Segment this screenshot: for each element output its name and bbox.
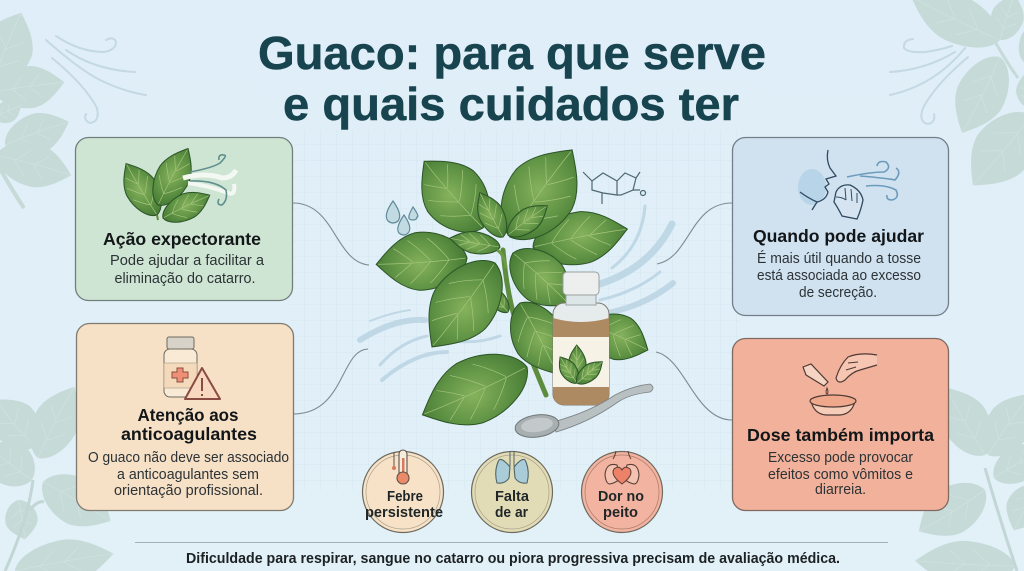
badge: febre persistente: persistente — [365, 504, 443, 521]
icon: coughing person — [798, 150, 899, 219]
decorative leaves: bottom left — [0, 377, 122, 571]
footer warning: Dificuldade para respirar, sangue no catarro ou piora progressiva precisam de avaliação médica. — [186, 551, 840, 567]
panel: ação expectorante — [76, 138, 292, 300]
connector lines — [293, 203, 732, 420]
icon: water drops — [386, 201, 418, 235]
syrup bottle — [553, 272, 609, 405]
decorative leaves: bottom right — [906, 376, 1024, 571]
heading: Atenção aos — [138, 405, 239, 425]
badge: febre persistente: Febre — [387, 488, 423, 505]
decorative leaves: top left — [0, 3, 77, 208]
text block: eliminação do catarro. — [114, 271, 256, 287]
badge: falta de ar — [472, 451, 552, 532]
icon: dose and bowl — [803, 354, 877, 415]
badge: dor no peito: peito — [603, 504, 638, 521]
text block — [757, 250, 921, 301]
text block: O guaco não deve ser associado — [88, 450, 289, 466]
icon: medicine bottle and warning — [164, 337, 220, 399]
icon: lungs — [496, 451, 528, 483]
badge: dor no peito: Dor no — [598, 488, 644, 505]
heading: Quando pode ajudar — [753, 226, 924, 246]
title: e quais cuidados ter — [283, 78, 739, 130]
badge: febre persistente — [362, 450, 444, 532]
icon: leaves and breath — [112, 141, 236, 230]
swooshes behind plant — [360, 206, 673, 380]
text block: Pode ajudar a facilitar a — [110, 253, 265, 269]
badge: falta de ar: Falta — [495, 488, 530, 505]
badge: dor no peito — [582, 451, 662, 532]
heading: Ação expectorante — [103, 229, 261, 249]
title — [258, 27, 766, 130]
panel: atenção aos anticoagulantes — [76, 324, 294, 510]
spoon — [514, 384, 653, 440]
background grid — [290, 130, 740, 490]
icon: thermometer — [392, 450, 409, 484]
panel: dose também importa — [732, 338, 948, 510]
text block: está associada ao excesso — [757, 268, 921, 284]
text block — [768, 450, 913, 498]
text block — [110, 253, 265, 287]
icon: heart and lungs — [605, 451, 639, 484]
text block: orientação profissional. — [114, 483, 263, 499]
title: Guaco: para que serve — [258, 27, 766, 79]
decorative wind swirl: top right — [890, 39, 968, 124]
divider — [135, 542, 888, 544]
stem — [503, 250, 546, 395]
heading — [121, 405, 257, 444]
decorative wind swirl: top left — [46, 36, 146, 123]
badge: falta de ar: de ar — [495, 504, 528, 521]
icon: molecule — [583, 172, 646, 204]
text block: diarreia. — [815, 482, 866, 498]
text block: a anticoagulantes sem — [117, 467, 259, 483]
heading: Dose também importa — [747, 425, 934, 445]
decorative leaves: top right — [901, 0, 1024, 204]
panel: quando pode ajudar — [732, 138, 948, 316]
heading: anticoagulantes — [121, 424, 257, 444]
text block: Excesso pode provocar — [768, 450, 913, 466]
text block: efeitos como vômitos e — [768, 467, 913, 483]
text block: É mais útil quando a tosse — [757, 250, 921, 267]
text block — [88, 450, 289, 499]
main guaco plant — [374, 130, 657, 444]
text block: de secreção. — [799, 285, 877, 301]
